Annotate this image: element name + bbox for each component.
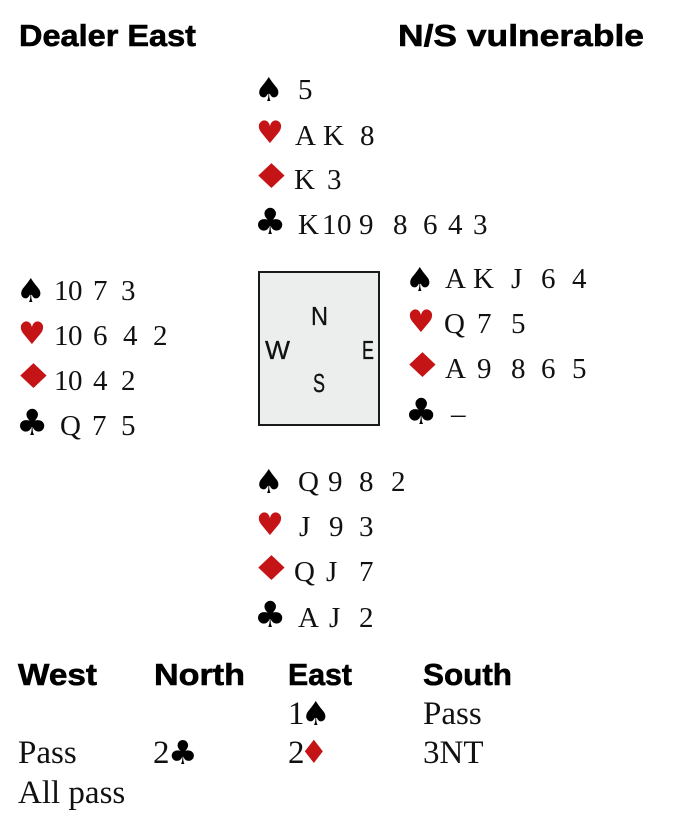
- compass table: [259, 272, 379, 425]
- west hand: ♥: [18, 316, 46, 352]
- west hand: 10642: [54, 320, 168, 352]
- compass table: W: [265, 335, 290, 365]
- east hand: Q75: [444, 308, 526, 340]
- north hand: ♠: [254, 70, 284, 109]
- auction bids: ♠: [301, 694, 331, 733]
- north hand: AK8: [295, 120, 374, 152]
- south hand: ♣: [254, 595, 286, 636]
- south hand: Q982: [298, 466, 406, 498]
- north hand: K1098643: [298, 209, 488, 241]
- heading: vulnerability: N/S vulnerable: [398, 18, 644, 53]
- auction bids: 2: [153, 735, 170, 771]
- west hand: ♦: [12, 356, 54, 396]
- south hand: QJ7: [294, 556, 374, 588]
- compass table: S: [313, 368, 325, 398]
- auction bids: Pass: [423, 696, 482, 732]
- auction bids: [18, 694, 484, 811]
- east hand: [402, 260, 587, 433]
- heading: dealer: Dealer East: [19, 18, 196, 53]
- east hand: –: [450, 398, 466, 430]
- north hand: ♦: [250, 156, 292, 196]
- north hand: K3: [294, 164, 342, 196]
- west hand: [12, 271, 168, 444]
- west hand: 1073: [54, 275, 136, 307]
- east hand: AKJ64: [445, 263, 587, 295]
- auction bids: 3NT: [423, 735, 484, 771]
- auction bids: 2: [288, 735, 304, 771]
- west hand: 1042: [54, 365, 136, 397]
- east hand: ♠: [405, 260, 435, 299]
- north hand: 5: [298, 74, 312, 106]
- auction bids: Pass: [18, 735, 77, 771]
- west hand: Q75: [60, 410, 136, 442]
- auction bids: 1: [288, 696, 304, 732]
- auction header: East: [288, 657, 352, 692]
- compass table: E: [362, 335, 374, 365]
- south hand: [250, 462, 406, 636]
- east hand: ♥: [407, 304, 435, 340]
- auction header: [18, 657, 512, 692]
- auction bids: All pass: [18, 775, 125, 811]
- auction header: North: [154, 657, 245, 692]
- west hand: ♣: [16, 403, 48, 444]
- auction bids: ♣: [168, 733, 198, 772]
- auction bids: ♦: [300, 733, 328, 771]
- south hand: ♠: [254, 462, 284, 501]
- south hand: ♦: [250, 548, 292, 588]
- east hand: A9865: [445, 353, 586, 385]
- south hand: J93: [299, 511, 374, 543]
- south hand: ♥: [256, 507, 284, 543]
- north hand: ♥: [256, 115, 284, 151]
- east hand: ♣: [405, 392, 437, 433]
- north hand: [250, 70, 488, 243]
- north hand: ♣: [254, 202, 286, 243]
- east hand: ♦: [402, 345, 443, 385]
- south hand: AJ2: [298, 602, 374, 634]
- west hand: ♠: [16, 271, 46, 310]
- auction header: South: [423, 657, 512, 692]
- auction header: West: [18, 657, 97, 692]
- compass table: N: [311, 301, 328, 331]
